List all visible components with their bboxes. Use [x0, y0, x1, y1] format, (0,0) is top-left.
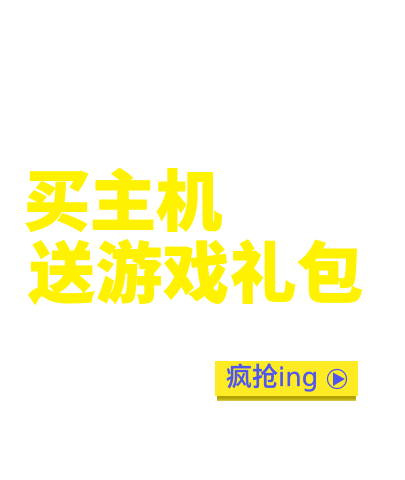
button label: 疯抢ing	[226, 363, 318, 393]
heading: line 1: 买主机	[24, 149, 222, 245]
icon: play circle	[326, 368, 348, 390]
button: crazy grab	[215, 361, 358, 396]
heading: line 2: 送游戏礼包	[29, 221, 364, 317]
button: shadow	[217, 395, 356, 401]
